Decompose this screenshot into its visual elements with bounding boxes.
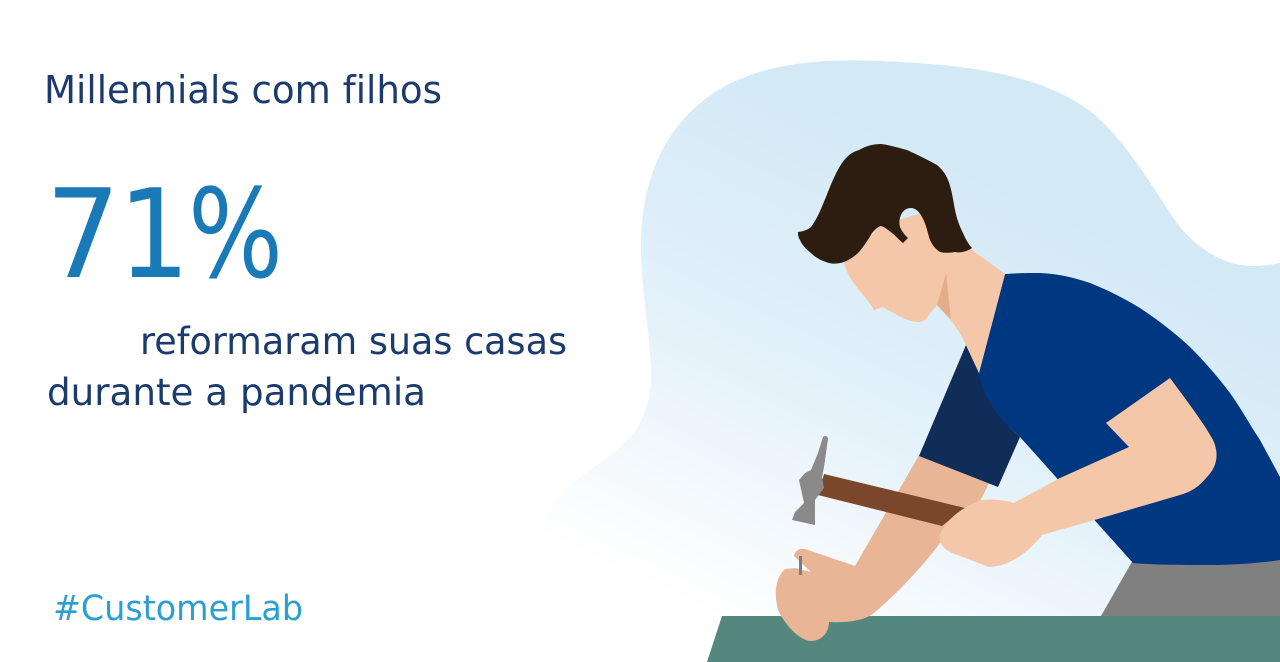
background blob — [500, 60, 1280, 662]
big statistic: 71%: % — [188, 164, 283, 307]
title: Millennials com filhos — [44, 68, 442, 112]
big statistic: 71%: 7 — [46, 164, 120, 307]
big statistic: 71%: 1 — [118, 164, 190, 307]
hashtag: #CustomerLab — [53, 589, 303, 629]
big statistic: 71% — [46, 164, 283, 307]
nail — [799, 556, 802, 575]
description text: reformaram suas casas — [140, 320, 567, 363]
table — [707, 616, 1280, 662]
hair — [798, 144, 972, 264]
hammer head — [792, 436, 828, 525]
illustration: man hammering a nail — [707, 144, 1280, 662]
description text: durante a pandemia — [47, 371, 426, 414]
trousers — [1101, 555, 1280, 616]
shirt — [979, 273, 1280, 565]
neck and face — [844, 210, 1005, 373]
hammer handle — [818, 474, 965, 526]
right arm and hand — [940, 378, 1217, 567]
left arm and hand — [776, 445, 995, 641]
neck shadow — [937, 273, 951, 320]
description text — [47, 320, 567, 414]
shirt sleeve, dark — [919, 345, 1020, 487]
